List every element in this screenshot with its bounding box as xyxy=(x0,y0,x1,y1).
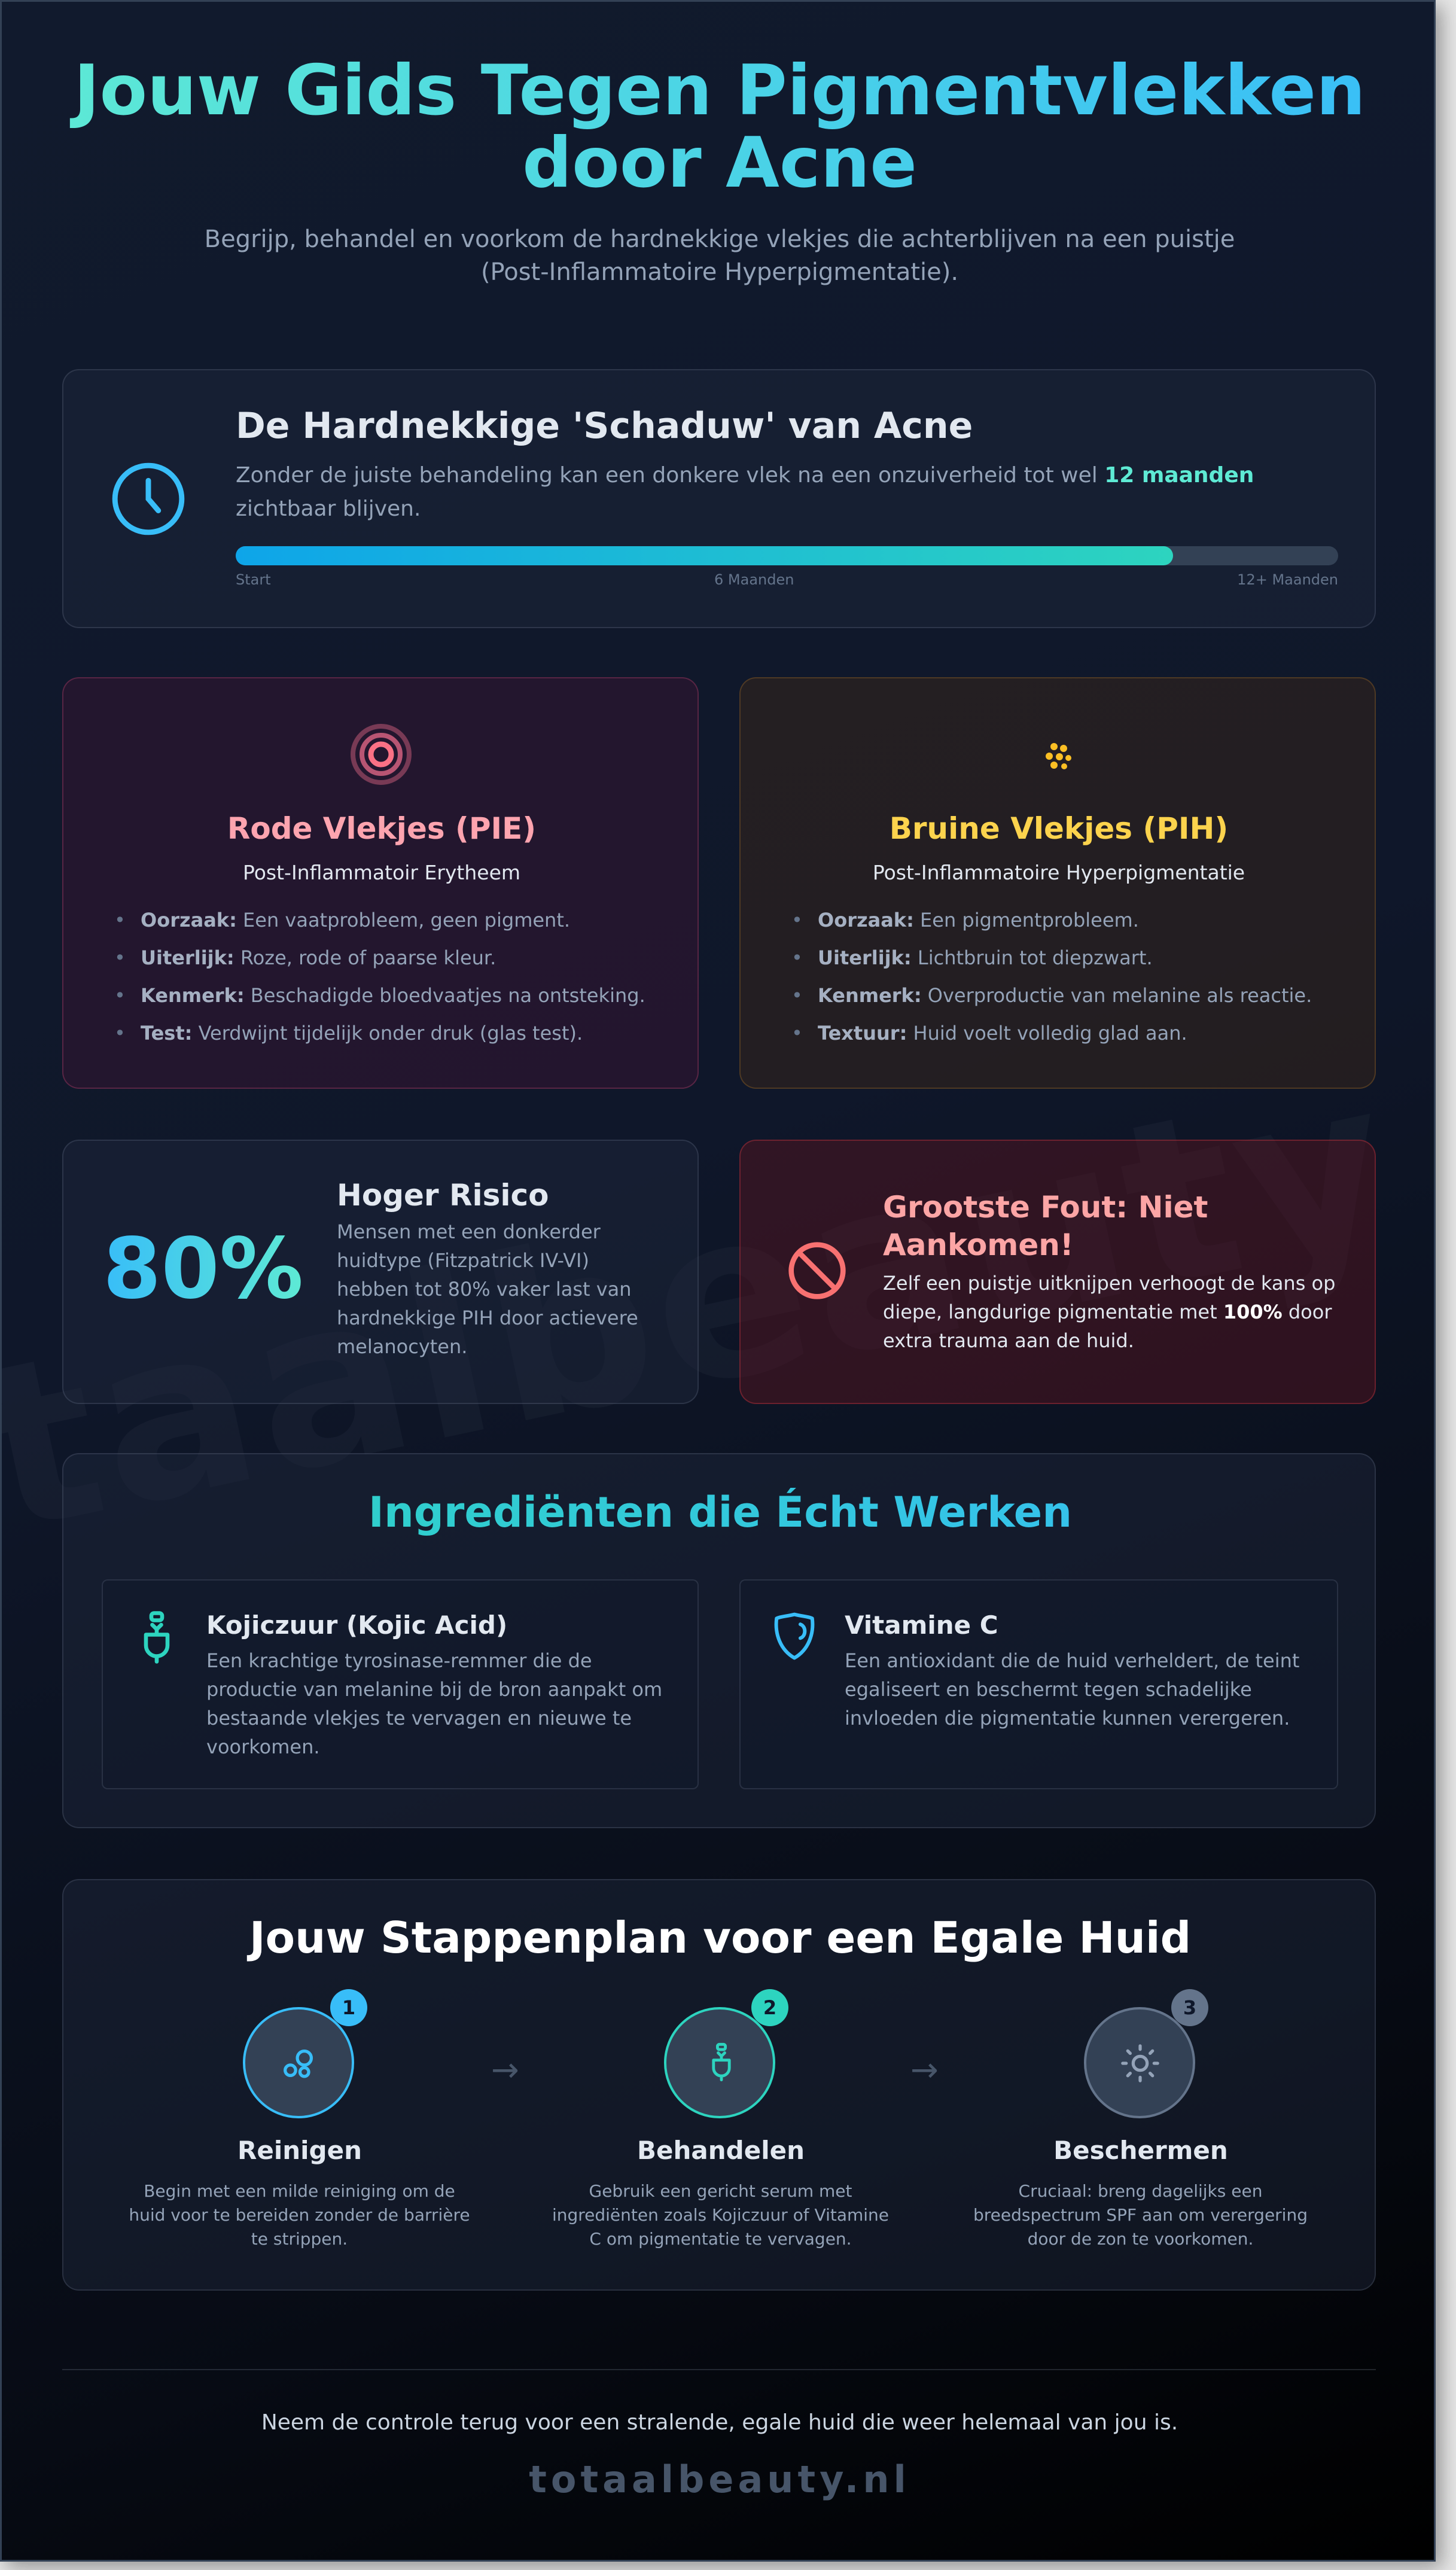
bullets: Oorzaak: Een vaatprobleem, geen pigment. xyxy=(141,909,570,931)
badge 1: 1 xyxy=(342,1996,355,2019)
heading: Bruine Vlekjes (PIH) xyxy=(890,811,1228,846)
card: vitamin C xyxy=(739,1579,1338,1789)
subtitle xyxy=(205,226,1235,286)
heading xyxy=(883,1190,1208,1262)
text: zichtbaar blijven. xyxy=(236,497,421,521)
bullets: Uiterlijk: Roze, rode of paarse kleur. xyxy=(141,946,496,969)
step 3 xyxy=(973,1989,1308,2249)
brand: totaalbeauty.nl xyxy=(529,2458,910,2501)
icon: shield xyxy=(774,1613,815,1659)
text xyxy=(236,463,1254,521)
step 1 xyxy=(129,1989,470,2249)
title: Kojiczuur (Kojic Acid) xyxy=(206,1610,507,1640)
badge 3: 3 xyxy=(1183,1996,1196,2019)
bar labels: 6 Maanden xyxy=(714,571,794,588)
title: door Acne xyxy=(522,123,917,203)
heading xyxy=(63,1488,1377,1537)
card: kojic xyxy=(102,1579,699,1789)
badge 3 xyxy=(1171,1989,1208,2026)
icon: sun circle xyxy=(1084,2007,1195,2118)
heading: Grootste Fout: Niet xyxy=(883,1190,1208,1225)
bullets: Kenmerk: Beschadigde bloedvaatjes na ontsteking. xyxy=(141,984,645,1007)
title: Behandelen xyxy=(637,2136,805,2165)
bullets: Kenmerk: Overproductie van melanine als reactie. xyxy=(818,984,1312,1007)
bullets: Uiterlijk: Lichtbruin tot diepzwart. xyxy=(818,946,1153,969)
badge 1 xyxy=(330,1989,367,2026)
heading: Hoger Risico xyxy=(337,1178,549,1213)
text: Begin met een milde reiniging om de huid voor te bereiden zonder de barrière te strippen. xyxy=(129,2181,470,2249)
bullets xyxy=(117,909,645,1045)
heading: Aankomen! xyxy=(883,1228,1074,1262)
icon: clock xyxy=(112,463,184,535)
step 2 xyxy=(552,1989,889,2249)
bullets xyxy=(794,909,1312,1045)
text: Gebruik een gericht serum met ingrediënten zoals Kojiczuur of Vitamine C om pigmentatie te vervagen. xyxy=(552,2181,889,2249)
icon: dots xyxy=(1046,743,1071,769)
title: Jouw Gids Tegen Pigmentvlekken xyxy=(74,50,1366,131)
text: Cruciaal: breng dagelijks een breedspectrum SPF aan om verergering door de zon te voorkomen. xyxy=(973,2181,1308,2249)
badge 2: 2 xyxy=(763,1996,776,2019)
heading: Ingrediënten die Écht Werken xyxy=(368,1488,1072,1537)
title: Reinigen xyxy=(237,2136,362,2165)
progress bar xyxy=(236,546,1338,565)
panel: risk xyxy=(62,1140,699,1404)
bar labels: Start xyxy=(236,571,271,588)
bullets: Oorzaak: Een pigmentprobleem. xyxy=(818,909,1139,931)
title: Vitamine C xyxy=(845,1610,998,1640)
heading: Rode Vlekjes (PIE) xyxy=(227,811,536,846)
icon: dropper circle xyxy=(664,2007,775,2118)
footer text: Neem de controle terug voor een stralende, egale huid die weer helemaal van jou is. xyxy=(261,2410,1178,2435)
bullets: Test: Verdwijnt tijdelijk onder druk (glas test). xyxy=(141,1022,583,1045)
panel: duration xyxy=(62,369,1376,628)
icon: red rings xyxy=(351,724,412,785)
subtitle: Begrijp, behandel en voorkom de hardnekkige vlekjes die achterblijven na een puistje xyxy=(205,226,1235,253)
icon: prohibited xyxy=(788,1242,846,1299)
text: Zonder de juiste behandeling kan een donkere vlek na een onzuiverheid tot wel 12 maanden xyxy=(236,463,1254,488)
icon: dropper xyxy=(144,1611,170,1664)
panel: steps xyxy=(62,1879,1376,2291)
title xyxy=(2,54,1437,199)
panel: PIE xyxy=(62,677,699,1089)
panel: ingredients xyxy=(62,1453,1376,1828)
text: Zelf een puistje uitknijpen verhoogt de kans op diepe, langdurige pigmentatie met 100% door extra trauma aan de huid. xyxy=(883,1272,1335,1352)
bullets: Textuur: Huid voelt volledig glad aan. xyxy=(818,1022,1187,1045)
heading: Jouw Stappenplan voor een Egale Huid xyxy=(249,1913,1191,1963)
arrow: → xyxy=(910,2051,939,2090)
panel: PIH xyxy=(739,677,1376,1089)
text: Een krachtige tyrosinase-remmer die de productie van melanine bij de bron aanpakt om bestaande vlekjes te vervagen en nieuwe te voorkomen. xyxy=(206,1649,662,1758)
subtitle: Post-Inflammatoir Erytheem xyxy=(243,861,520,884)
heading: De Hardnekkige 'Schaduw' van Acne xyxy=(236,405,973,447)
subtitle: Post-Inflammatoire Hyperpigmentatie xyxy=(873,861,1245,884)
subtitle: (Post-Inflammatoire Hyperpigmentatie). xyxy=(481,258,958,286)
icon: bubbles circle xyxy=(243,2007,354,2118)
bar labels: 12+ Maanden xyxy=(1237,571,1338,588)
title: Beschermen xyxy=(1053,2136,1228,2165)
text: Een antioxidant die de huid verheldert, de teint egaliseert en beschermt tegen schadelijke invloeden die pigmentatie kunnen verergeren. xyxy=(845,1649,1299,1729)
stat: 80%: 80% xyxy=(103,1220,303,1318)
badge 2 xyxy=(751,1989,788,2026)
panel: biggest mistake xyxy=(739,1140,1376,1404)
arrow: → xyxy=(491,2051,519,2090)
text: Mensen met een donkerder huidtype (Fitzpatrick IV-VI) hebben tot 80% vaker last van hardnekkige PIH door actievere melanocyten. xyxy=(337,1220,638,1358)
bar labels xyxy=(236,571,1338,588)
